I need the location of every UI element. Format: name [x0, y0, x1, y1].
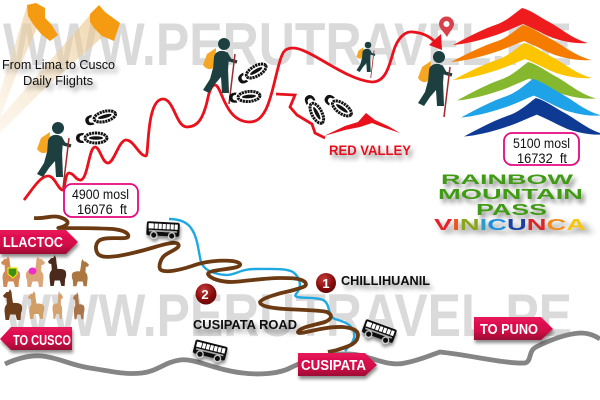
title: rainbow mountain pass vinicunca: VINICUNCA — [434, 216, 586, 234]
mountain: blue — [461, 79, 600, 117]
bus 1 — [146, 221, 180, 240]
flight beams and Peru maps — [0, 3, 120, 133]
title: rainbow mountain pass vinicunca: PASS — [476, 202, 548, 219]
sign: cusipata — [298, 353, 377, 376]
marker 2 — [196, 284, 216, 304]
label: chillihuanil: CHILLIHUANIL — [341, 273, 430, 288]
llama 8 — [73, 292, 84, 319]
river — [169, 219, 354, 351]
sign: to puno: TO PUNO — [480, 322, 538, 338]
altitude box left: 4900 mosl — [72, 186, 129, 202]
altitude box left: 16076 ft — [77, 201, 127, 217]
highway — [5, 333, 600, 374]
map: left — [27, 3, 58, 41]
sign: to cusco: TO CUSCO — [13, 333, 71, 349]
altitude box left — [64, 184, 138, 217]
rainbow mountains — [451, 8, 600, 136]
hiker 1 — [37, 122, 71, 188]
llama 1 with green saddle — [1, 256, 20, 287]
title: rainbow mountain pass vinicunca: MOUNTAIN — [438, 186, 583, 203]
footprints 1 — [76, 109, 117, 143]
altitude box right: 16732 ft — [517, 150, 567, 166]
beam: left — [0, 6, 38, 118]
flights caption line 2: Daily Flights — [23, 74, 93, 88]
pin icon — [439, 17, 454, 37]
map: right — [90, 5, 120, 41]
llama 2 with pink saddle — [26, 256, 45, 287]
llama 7 — [52, 291, 63, 319]
trail arrowhead — [429, 34, 442, 50]
hiker 3 small — [356, 42, 375, 78]
footprints 3 — [303, 93, 354, 125]
sign: llactoc: LLACTOC — [3, 235, 63, 251]
label: cusipata road: CUSIPATA ROAD — [193, 317, 297, 332]
sign: llactoc — [0, 230, 78, 254]
brown road — [34, 216, 358, 352]
beam: right — [0, 15, 106, 133]
mountain: orange — [451, 25, 591, 62]
mountain: green — [457, 62, 596, 100]
mountain: yellow — [453, 43, 592, 80]
title: rainbow mountain pass vinicunca — [434, 171, 586, 234]
title: rainbow mountain pass vinicunca: RAINBOW — [441, 171, 575, 187]
mountain: red — [453, 8, 588, 45]
sign: to cusco — [0, 327, 72, 350]
marker 2: 2 — [201, 287, 209, 302]
sign: cusipata: CUSIPATA — [301, 358, 366, 374]
sign: to puno — [474, 317, 553, 340]
bus 2 — [192, 339, 228, 363]
altitude box right — [504, 133, 579, 166]
red valley branch — [276, 94, 325, 138]
red hiking trail — [24, 32, 437, 200]
llama 3 — [48, 255, 66, 286]
llama 5 — [3, 289, 22, 320]
mountain: navy — [464, 98, 600, 136]
flights caption: From Lima to Cusco — [2, 58, 115, 72]
footprints 2 — [229, 61, 268, 103]
bus 3 — [361, 319, 397, 346]
hiker 4 — [418, 51, 452, 117]
marker 1: 1 — [322, 276, 330, 291]
marker 1 — [316, 273, 336, 293]
llama 6 — [28, 291, 44, 319]
hiker 2 — [203, 38, 237, 104]
llamas — [1, 255, 89, 320]
red valley label: RED VALLEY — [329, 142, 412, 158]
red valley mountain — [324, 113, 400, 136]
altitude box right: 5100 mosl — [513, 135, 570, 151]
llama 4 — [72, 259, 89, 286]
